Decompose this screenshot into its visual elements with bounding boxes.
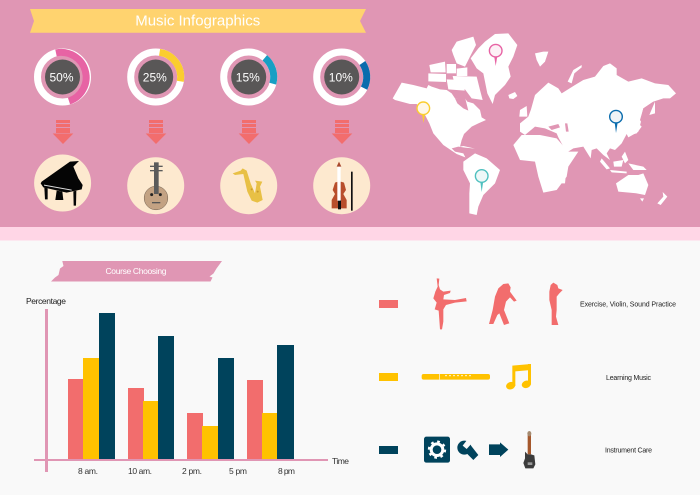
donut: 25%: 25% (143, 70, 167, 84)
donut: 10%: 10% (329, 70, 353, 84)
legend row: exercise, violin, sound practice (379, 278, 676, 329)
icon: flute (422, 374, 490, 380)
bars: 8 pm (247, 345, 294, 460)
Japan (630, 123, 642, 135)
bars: 8 am (68, 313, 115, 460)
Novaya Zemlya (568, 65, 582, 83)
icon: violinist (489, 283, 517, 325)
legend row: learning music: Learning Music (606, 375, 652, 382)
bars: 2 pm (187, 358, 234, 460)
pin: yellow (417, 102, 430, 123)
x-axis labels: 5 pm (229, 466, 247, 476)
donut: 15%: 15% (236, 70, 260, 84)
legend row: exercise, violin, sound practice: Exercise, Violin, Sound Practice (580, 302, 676, 308)
pin: blue (610, 110, 622, 133)
New Zealand (657, 192, 667, 205)
arrow: piano (53, 120, 73, 144)
x-axis labels: Time (332, 456, 349, 466)
Sea of Okhotsk (641, 102, 653, 120)
donut: 25% (131, 52, 181, 102)
Sakhalin (649, 102, 655, 115)
icon: gear (424, 437, 450, 463)
Black Sea (548, 124, 560, 130)
icon: saxophone (220, 157, 277, 214)
x-axis labels: 8 am. (78, 466, 98, 476)
arrow: violin (332, 120, 352, 144)
legend row: learning music (379, 364, 652, 391)
icon: music notes (505, 364, 532, 391)
title ribbon: Music Infographics (135, 12, 260, 30)
Iceland (508, 92, 517, 99)
Greenland (471, 33, 517, 104)
section banner: Course Choosing: Course Choosing (106, 266, 167, 276)
donut: 15% (224, 52, 274, 102)
Southeast Asia islands (600, 152, 647, 173)
arrow: pipa (146, 120, 166, 144)
Africa (513, 135, 578, 193)
x-axis labels: 2 pm. (182, 466, 202, 476)
title ribbon (30, 9, 366, 33)
icon: violin and bow (313, 157, 370, 214)
Madagascar (562, 173, 566, 183)
Canadian arctic islands (428, 37, 483, 100)
x-axis labels: 8 pm (278, 466, 295, 476)
x-axis labels: 10 am. (128, 466, 152, 476)
icon: wrench (457, 438, 478, 460)
legend row: instrument care: Instrument Care (605, 448, 652, 454)
Australia (616, 173, 648, 195)
icon: bass guitar (523, 431, 535, 468)
world map (393, 33, 676, 215)
Britain (519, 106, 527, 117)
donut: 50%: 50% (49, 70, 74, 84)
Eurasia (520, 63, 676, 160)
y-axis label: Percentage (26, 296, 66, 306)
x-axis labels (78, 456, 349, 476)
donut: 50% (38, 52, 88, 102)
icon: grand piano (34, 154, 91, 212)
Svalbard (535, 52, 548, 67)
bars: 10 am (128, 336, 174, 460)
legend row: instrument care (379, 431, 652, 468)
arrow: saxophone (239, 120, 259, 144)
North America (393, 83, 486, 157)
South America (463, 153, 500, 215)
bar chart (26, 296, 349, 476)
icon: dancer (433, 278, 467, 329)
donut: 10% (317, 52, 367, 102)
icon: pipa (127, 157, 184, 214)
axes (34, 309, 328, 472)
pin: teal (475, 170, 488, 192)
section banner: Course Choosing (51, 261, 222, 282)
pin: pink (489, 44, 502, 66)
icon: arrow (489, 442, 508, 457)
icon: singer (549, 283, 563, 325)
Caspian Sea (565, 123, 569, 132)
